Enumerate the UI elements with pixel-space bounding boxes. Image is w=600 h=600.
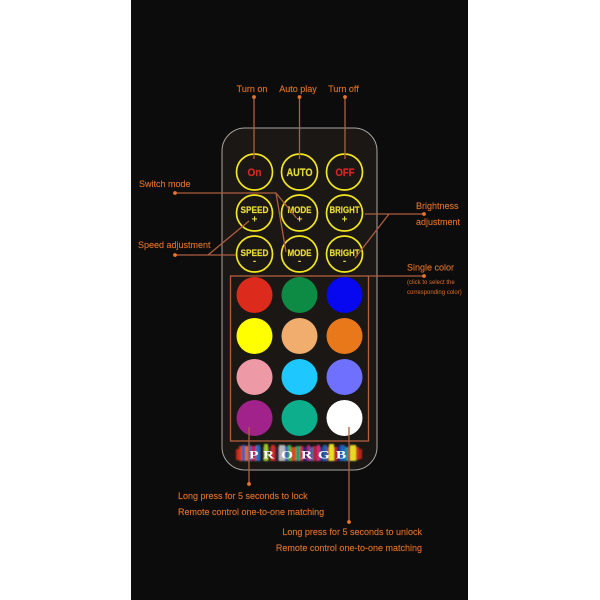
label: unlock instructions: Remote control one-to-one matching bbox=[276, 543, 422, 553]
leader: Turn off bbox=[343, 95, 347, 159]
label: lock instructions: Long press for 5 seconds to lock bbox=[178, 491, 308, 501]
minus buttons bbox=[236, 236, 362, 272]
button: SPEED plus: + bbox=[252, 214, 258, 226]
button: SPEED minus bbox=[236, 236, 272, 272]
button: BRIGHT plus bbox=[326, 195, 362, 231]
label: Brightness adjustment: Brightness bbox=[416, 201, 459, 211]
colour grid outline bbox=[230, 276, 368, 441]
button: MODE plus: + bbox=[297, 214, 303, 226]
label: unlock instructions: Long press for 5 seconds to unlock bbox=[282, 527, 422, 537]
label: Single color: Single color bbox=[407, 262, 454, 272]
button: OFF: OFF bbox=[336, 167, 355, 179]
label: Single color: corresponding color) bbox=[407, 290, 462, 296]
button: BRIGHT minus: BRIGHT bbox=[330, 248, 360, 258]
leader: Brightness adjustment bbox=[355, 212, 426, 258]
leader: Turn on bbox=[252, 95, 256, 159]
button: MODE plus: MODE bbox=[288, 205, 312, 215]
button: BRIGHT minus bbox=[326, 236, 362, 272]
leader: Switch mode bbox=[173, 191, 296, 252]
label: Auto play: Auto play bbox=[279, 84, 317, 94]
button: MODE minus: - bbox=[298, 256, 301, 267]
button: SPEED plus bbox=[236, 195, 272, 231]
label: Turn off: Turn off bbox=[328, 84, 359, 94]
button: MODE plus bbox=[282, 195, 318, 231]
button: BRIGHT plus: BRIGHT bbox=[330, 205, 360, 215]
label: Single color bbox=[407, 262, 462, 296]
button: SPEED minus: - bbox=[253, 256, 256, 267]
logo: PRO RGB: PRORGB bbox=[249, 448, 346, 461]
leader: Auto play bbox=[298, 95, 301, 159]
button: SPEED plus: SPEED bbox=[240, 205, 269, 215]
label: Brightness adjustment bbox=[416, 201, 461, 227]
button: BRIGHT plus: + bbox=[342, 214, 348, 226]
button: MODE minus bbox=[282, 236, 318, 272]
button: BRIGHT minus: - bbox=[343, 256, 346, 267]
leader: unlock bbox=[347, 427, 351, 524]
label: Switch mode: Switch mode bbox=[139, 179, 191, 189]
plus buttons bbox=[236, 195, 362, 231]
button: On: On bbox=[248, 167, 262, 179]
button: MODE minus: MODE bbox=[288, 248, 312, 258]
label: Single color: (click to select the bbox=[407, 280, 455, 286]
power and auto buttons bbox=[236, 154, 362, 190]
logo: PRO RGB bbox=[236, 444, 362, 461]
label: lock instructions: Remote control one-to-one matching bbox=[178, 507, 324, 517]
button: SPEED minus: SPEED bbox=[240, 248, 269, 258]
leader: Speed adjustment bbox=[173, 221, 249, 257]
button: AUTO: AUTO bbox=[286, 167, 313, 179]
colour button grid bbox=[236, 277, 362, 436]
remote control body bbox=[222, 128, 377, 470]
leader: lock bbox=[247, 427, 251, 486]
label: unlock instructions bbox=[276, 527, 422, 553]
label: Turn on: Turn on bbox=[237, 84, 267, 94]
label: lock instructions bbox=[178, 491, 324, 517]
label: Speed adjustment: Speed adjustment bbox=[138, 240, 211, 250]
black background panel bbox=[131, 0, 468, 600]
leader: Single color bbox=[369, 274, 426, 278]
label: Brightness adjustment: adjustment bbox=[416, 217, 461, 227]
